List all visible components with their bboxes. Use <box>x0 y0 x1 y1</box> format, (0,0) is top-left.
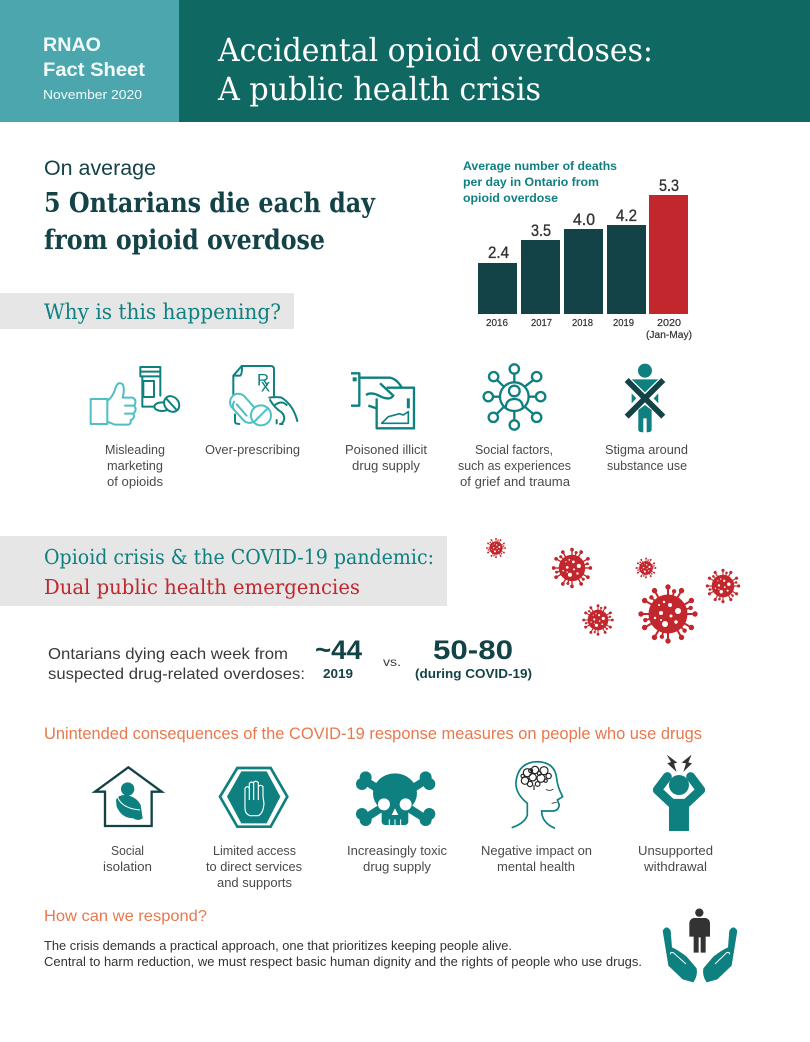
cause: stigma <box>605 364 688 473</box>
bar values: 5.3 <box>659 177 679 195</box>
headline statistic: from opioid overdose <box>44 225 325 256</box>
label: Unsupported <box>638 844 713 858</box>
cause: over-prescribing <box>205 366 300 457</box>
header: title: A public health crisis <box>217 70 541 108</box>
text: response: The crisis demands a practical approach, one that prioritizes keeping people alive. <box>44 939 512 953</box>
label: Social <box>111 844 144 858</box>
bar values: 4.2 <box>616 207 637 225</box>
icons: virus particles <box>486 538 740 644</box>
chart title: Average number of deaths <box>463 159 617 173</box>
label <box>105 443 165 489</box>
label: mental health <box>497 860 575 874</box>
icon: stop hand hexagon <box>220 768 287 827</box>
label: Limited access <box>213 844 296 858</box>
consequence: social isolation <box>95 767 162 874</box>
year labels: 2019 <box>613 318 634 329</box>
label: Stigma around <box>605 443 688 457</box>
chart title <box>463 159 617 205</box>
2019 figure <box>315 635 362 681</box>
header band <box>0 0 810 122</box>
year labels: 2017 <box>531 318 552 329</box>
covid figure: 50-80 <box>433 635 513 665</box>
header: fact sheet tab: Fact Sheet <box>43 60 146 81</box>
icon: hand holding baggie <box>351 373 414 428</box>
consequence: unsupported withdrawal <box>638 755 713 874</box>
covid figure: (during COVID-19) <box>415 666 532 681</box>
vs: vs. <box>383 655 401 669</box>
description: Ontarians dying each week from <box>48 646 288 663</box>
bar values: 3.5 <box>531 222 551 240</box>
header: fact sheet tab <box>0 0 179 122</box>
year labels: 2018 <box>572 318 593 329</box>
bar values: 4.0 <box>573 211 595 229</box>
label: drug supply <box>352 459 421 473</box>
icon: prescription and pills: x <box>261 376 270 396</box>
icon: skull and crossbones <box>356 771 435 826</box>
label: Negative impact on <box>481 844 592 858</box>
label: Over-prescribing <box>205 443 300 457</box>
covid figure <box>415 635 532 681</box>
cause: misleading marketing <box>91 367 182 489</box>
headline statistic: 5 Ontarians die each day <box>44 188 376 219</box>
description: suspected drug-related overdoses: <box>48 666 305 683</box>
label: withdrawal <box>643 860 707 874</box>
statistic: weekly deaths comparison <box>48 635 532 683</box>
2019 figure: ~44 <box>315 635 362 665</box>
heading: how can we respond: How can we respond? <box>44 908 207 925</box>
bars <box>478 195 688 314</box>
label: isolation <box>103 860 152 874</box>
label: such as experiences <box>458 459 571 473</box>
bar values: 2.4 <box>488 244 509 262</box>
label <box>206 844 302 890</box>
heading: why is this happening: Why is this happening? <box>44 300 281 324</box>
header: title: Accidental opioid overdoses: <box>217 31 653 69</box>
icon: head with tangled brain <box>512 762 563 828</box>
description <box>48 646 305 683</box>
label: and supports <box>217 876 292 890</box>
icon: hands holding a person <box>663 908 737 982</box>
icon: prescription and pills <box>227 366 297 426</box>
year labels <box>486 318 692 341</box>
year labels: (Jan-May) <box>646 330 692 341</box>
cause: social factors <box>458 364 571 489</box>
label: of opioids <box>107 475 163 489</box>
heading: why is this happening <box>0 293 294 329</box>
header: fact sheet tab: RNAO <box>43 35 101 56</box>
label: Social factors, <box>475 443 553 457</box>
header: title <box>179 0 810 122</box>
text: response: Central to harm reduction, we must respect basic human dignity and the rights of people who use drugs. <box>44 955 642 969</box>
heading: unintended consequences: Unintended consequences of the COVID-19 response measures on people who use drugs <box>44 725 702 743</box>
label <box>103 844 152 874</box>
heading: opioid crisis and covid-19 <box>0 536 447 606</box>
label <box>345 443 428 473</box>
bar values <box>488 177 679 262</box>
text: response <box>44 939 642 969</box>
header: fact sheet tab: November 2020 <box>43 87 142 102</box>
consequence: limited access <box>206 768 302 890</box>
icon: prescription and pills: R <box>257 371 269 390</box>
year labels: 2020 <box>657 318 681 329</box>
heading: opioid crisis and covid-19: Opioid crisis & the COVID-19 pandemic: <box>44 545 434 569</box>
year labels: 2016 <box>486 318 508 329</box>
icon: person clutching head <box>657 755 701 831</box>
label: marketing <box>107 459 163 473</box>
label: drug supply <box>363 860 432 874</box>
icon: crossed-out person <box>627 364 663 432</box>
chart title: opioid overdose <box>463 191 558 205</box>
cause: poisoned drug supply <box>345 373 428 473</box>
heading: opioid crisis and covid-19: Dual public health emergencies <box>44 575 360 599</box>
icon: person in house <box>95 767 162 826</box>
bar chart: average deaths per day <box>463 159 692 341</box>
label: of grief and trauma <box>460 475 570 489</box>
label <box>347 844 447 874</box>
label: to direct services <box>206 860 302 874</box>
label <box>638 844 713 874</box>
consequence: toxic drug supply <box>347 771 447 874</box>
icon: thumbs up and pill bottle <box>91 367 182 425</box>
label <box>481 844 592 874</box>
icon: person network <box>484 364 545 430</box>
label <box>458 443 571 489</box>
label: Misleading <box>105 443 165 457</box>
2019 figure: 2019 <box>323 666 353 681</box>
headline statistic: On average <box>44 157 156 180</box>
label <box>605 443 688 473</box>
headline statistic <box>44 157 376 256</box>
label: Poisoned illicit <box>345 443 428 457</box>
consequence: mental health <box>481 762 592 874</box>
label: Increasingly toxic <box>347 844 447 858</box>
chart title: per day in Ontario from <box>463 175 599 189</box>
label: substance use <box>607 459 687 473</box>
